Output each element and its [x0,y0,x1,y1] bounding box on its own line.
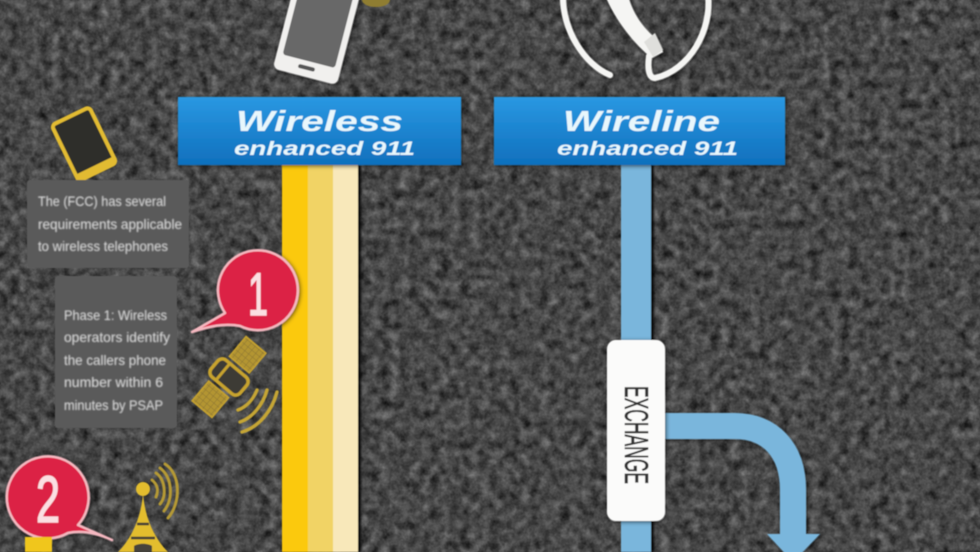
banner: wireline enhanced 911: Wireline [563,106,720,138]
banner: wireless enhanced 911: Wireless [236,106,403,138]
icon: satellite [187,333,277,432]
icon: smartphone [273,0,365,85]
text box: phase 1: the callers phone [64,352,166,368]
text box: phase 1: operators identify [64,329,170,345]
text box: phase 1 [55,276,177,428]
icon: yellow mark at top edge [362,0,390,7]
line: wireline blue main [621,165,651,552]
text box: phase 1: minutes by PSAP [64,397,163,413]
banner: wireless enhanced 911: enhanced 911 [234,139,415,160]
text box: FCC requirements: to wireless telephones [38,238,168,254]
line: second yellow road stub [25,537,52,552]
arrow: exchange branch [660,426,820,552]
text box: FCC requirements: requirements applicable [38,216,182,232]
callout: number 1: 1 [248,261,268,328]
banner: wireline enhanced 911 [494,97,785,165]
banner: wireless enhanced 911 [178,97,461,165]
label: exchange [607,340,665,521]
text box: phase 1: number within 6 [64,374,163,390]
line: wireless yellow road [282,165,358,552]
text box: FCC requirements [27,180,189,268]
callout: number 2 [7,456,112,540]
banner: wireline enhanced 911: enhanced 911 [557,139,738,160]
text box: FCC requirements: The (FCC) has several [38,193,166,209]
icon: small yellow phone [52,107,116,181]
icon: signal tower [118,464,177,552]
icon: telephone handset in circle [563,0,708,78]
callout: number 1 [192,250,298,332]
callout: number 2: 2 [36,462,60,536]
text box: phase 1: Phase 1: Wireless [64,307,167,323]
